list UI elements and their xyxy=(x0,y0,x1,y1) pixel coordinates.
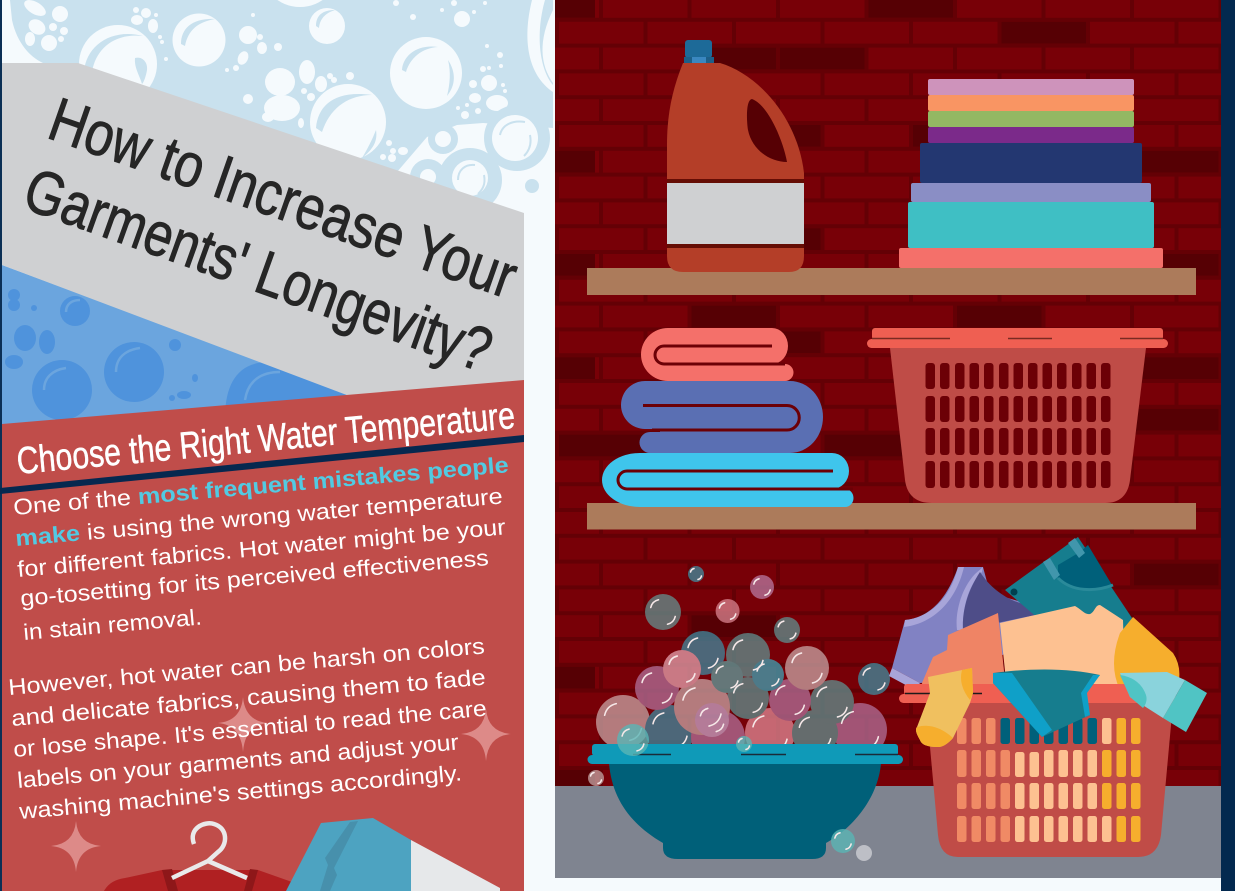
icon: detergent bottle xyxy=(667,40,804,272)
yellow sock xyxy=(916,668,973,747)
body text: second paragraph: washing machine's settings accordingly. xyxy=(17,760,463,824)
lavender tank top xyxy=(889,567,1050,690)
floor xyxy=(555,786,1221,878)
basket rim and body xyxy=(899,684,1176,857)
body text: first paragraph: One of the most frequent mistakes people xyxy=(12,452,510,520)
sparkles xyxy=(51,697,511,872)
basket holes xyxy=(957,718,1140,842)
panel: water temperature section xyxy=(0,380,524,891)
icon: soap bubbles in basin xyxy=(588,566,890,786)
body text: second paragraph: However, hot water can be harsh on colors xyxy=(7,633,486,700)
icon: empty laundry basket xyxy=(867,328,1168,503)
lower shelf xyxy=(587,503,1196,530)
body text: second paragraph xyxy=(7,633,488,824)
body text: first paragraph: in stain removal. xyxy=(22,604,203,645)
panel: brick wall scene xyxy=(555,0,1221,878)
body text: first paragraph xyxy=(12,452,510,645)
body text: first paragraph: make is using the wrong water temperature xyxy=(14,483,504,551)
large bubbles xyxy=(79,0,462,160)
icon: stack of folded clothes xyxy=(899,79,1163,268)
panel: blue bubble strip xyxy=(2,265,352,426)
body text: second paragraph: or lose shape. It's essential to read the care xyxy=(12,696,488,762)
title: How to Increase Your xyxy=(40,85,526,312)
icon: front bubbles xyxy=(617,724,872,861)
section heading: Choose the Right Water Temperature xyxy=(15,395,517,483)
teal jeans xyxy=(1005,537,1132,640)
divider stripe xyxy=(0,435,524,494)
yellow cloth xyxy=(1114,617,1179,690)
title: Garments' Longevity? xyxy=(15,155,501,386)
peach shirt xyxy=(1000,605,1125,690)
salmon cloth xyxy=(922,613,1007,700)
upper shelf xyxy=(587,268,1196,295)
brick wall xyxy=(555,0,1221,786)
panel: title banner xyxy=(2,63,526,397)
icon: folded towels xyxy=(602,328,854,507)
body text: first paragraph: for different fabrics. Hot water might be your xyxy=(16,514,507,582)
icon: red shirt on hanger xyxy=(104,823,292,891)
light teal cloth xyxy=(1120,672,1207,732)
soap spots xyxy=(22,0,553,162)
panel: soap bubble background xyxy=(10,0,553,212)
teal cloth draped over rim xyxy=(993,669,1100,737)
body text: second paragraph: and delicate fabrics, causing them to fade xyxy=(10,665,487,731)
icon: blue wash basin xyxy=(588,744,903,859)
icon: laundry basket with clothes xyxy=(889,537,1207,857)
icon: folded blue and white garment xyxy=(286,818,500,891)
body text: second paragraph: labels on your garments and adjust your xyxy=(16,729,460,793)
body text: first paragraph: go-tosetting for its perceived effectiveness xyxy=(19,545,490,611)
ring bubbles xyxy=(410,105,550,212)
